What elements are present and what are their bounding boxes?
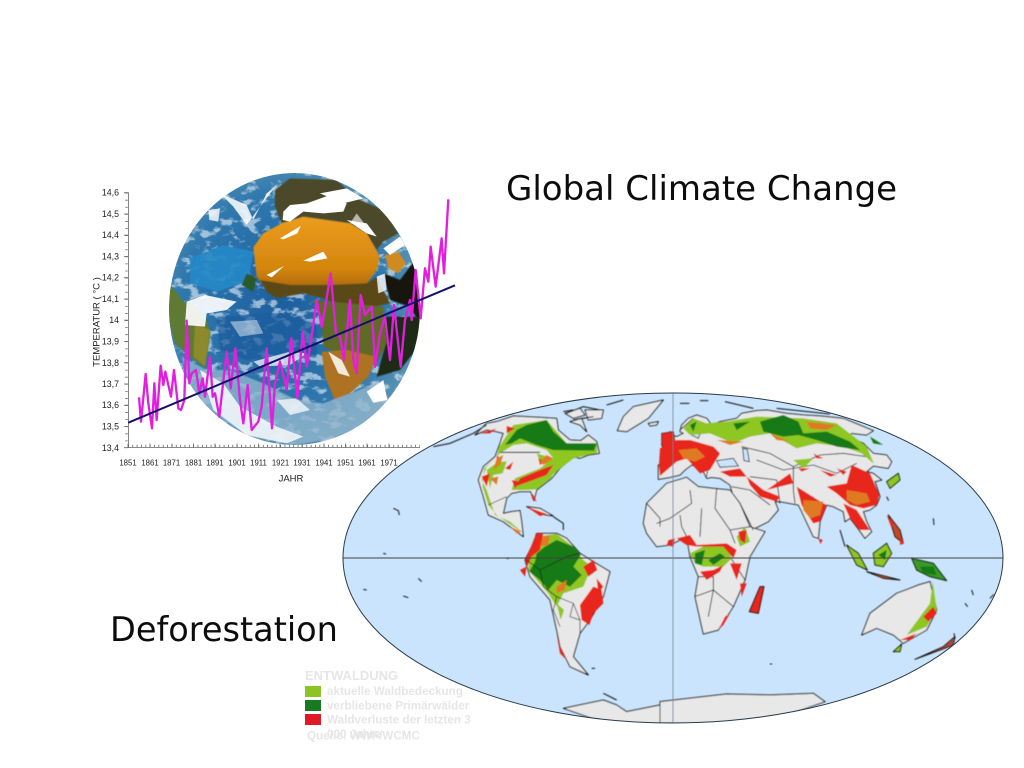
equator and central meridian (343, 557, 1003, 559)
legend labels: Waldverluste der letzten 3 (327, 714, 471, 726)
Arabia (385, 252, 406, 273)
boreal forest light green (683, 417, 937, 635)
y axis labels: 14,3 (102, 252, 119, 262)
x axis labels (119, 458, 398, 468)
deforestation red (659, 440, 937, 640)
y axis labels: 13,9 (102, 336, 119, 346)
eastern hemisphere (643, 401, 994, 723)
heading: Global Climate Change: Global Climate Change (506, 169, 897, 209)
Europe and Middle East (275, 178, 398, 250)
legend: Entwaldung (305, 668, 471, 742)
legend labels: aktuelle Waldbedeckung (327, 685, 463, 698)
y axis labels: 14,6 (102, 188, 119, 198)
legend labels: Quelle: WWF/WCMC (307, 730, 421, 742)
globe photo (165, 170, 425, 450)
x axis labels: 1881 (185, 458, 202, 468)
legend labels (307, 685, 471, 742)
border lines (647, 418, 867, 617)
y axis title: TEMPERATUR ( °C ) (92, 277, 102, 367)
temperature chart (92, 188, 455, 484)
deforestation world map (343, 393, 1003, 727)
Africa (643, 477, 765, 634)
Congo and southern Africa (313, 300, 387, 363)
y axis labels: 13,6 (102, 400, 119, 410)
x axis labels: 1911 (250, 458, 267, 468)
heading: Deforestation: Deforestation (110, 610, 338, 649)
x axis labels: 1851 (119, 458, 137, 468)
legend heading: ENTWALDUNG (305, 668, 398, 683)
swatch: forest losses (305, 714, 321, 725)
swatch: remaining primary forest (305, 700, 321, 711)
x axis labels: 1861 (141, 458, 159, 468)
x axis labels: 1971 (380, 458, 398, 468)
temperature series (139, 199, 448, 430)
y axis labels: 14,5 (102, 209, 119, 219)
y axis labels (102, 188, 119, 453)
Sahara (253, 217, 380, 297)
Eurasia (658, 410, 892, 538)
small islands (680, 401, 994, 664)
x axis labels: 1961 (358, 458, 376, 468)
forest cover light green (482, 420, 597, 620)
x axis labels: 1871 (163, 458, 180, 468)
y axis labels: 14,2 (102, 272, 119, 282)
y axis labels: 14 (109, 315, 119, 325)
x axis labels: 1941 (315, 458, 333, 468)
primary forest dark green (505, 420, 597, 590)
y axis labels: 13,8 (102, 358, 119, 368)
x axis labels: 1931 (293, 458, 311, 468)
legend labels: 000 Jahre (327, 728, 381, 741)
x axis title: JAHR (279, 474, 304, 484)
chart axes (124, 192, 420, 448)
x axis labels: 1921 (272, 458, 289, 468)
Alaska and Canada (475, 416, 599, 537)
cloud details (185, 185, 405, 443)
x axis labels: 1901 (228, 458, 246, 468)
inland seas (690, 433, 750, 468)
East Africa dark (383, 260, 422, 323)
y axis labels: 14,4 (102, 230, 119, 240)
x axis labels: 1951 (337, 458, 354, 468)
deforestation red (480, 426, 603, 660)
southern swirl (182, 357, 390, 445)
y axis labels: 13,4 (102, 443, 119, 453)
y axis labels: 13,7 (102, 379, 119, 389)
swatch: current forest cover (305, 686, 321, 697)
trend line (128, 285, 455, 423)
South America (169, 283, 211, 368)
western hemisphere (363, 400, 683, 727)
primary forest dark green (690, 415, 937, 575)
y axis labels: 13,5 (102, 422, 119, 432)
legend labels: verbliebene Primärwälder (327, 700, 470, 712)
y axis labels: 14,1 (102, 294, 119, 304)
Sahel band (260, 277, 390, 310)
arctic and small islands (363, 400, 623, 700)
x axis labels: 1891 (206, 458, 224, 468)
bright mid-Atlantic (190, 245, 253, 292)
